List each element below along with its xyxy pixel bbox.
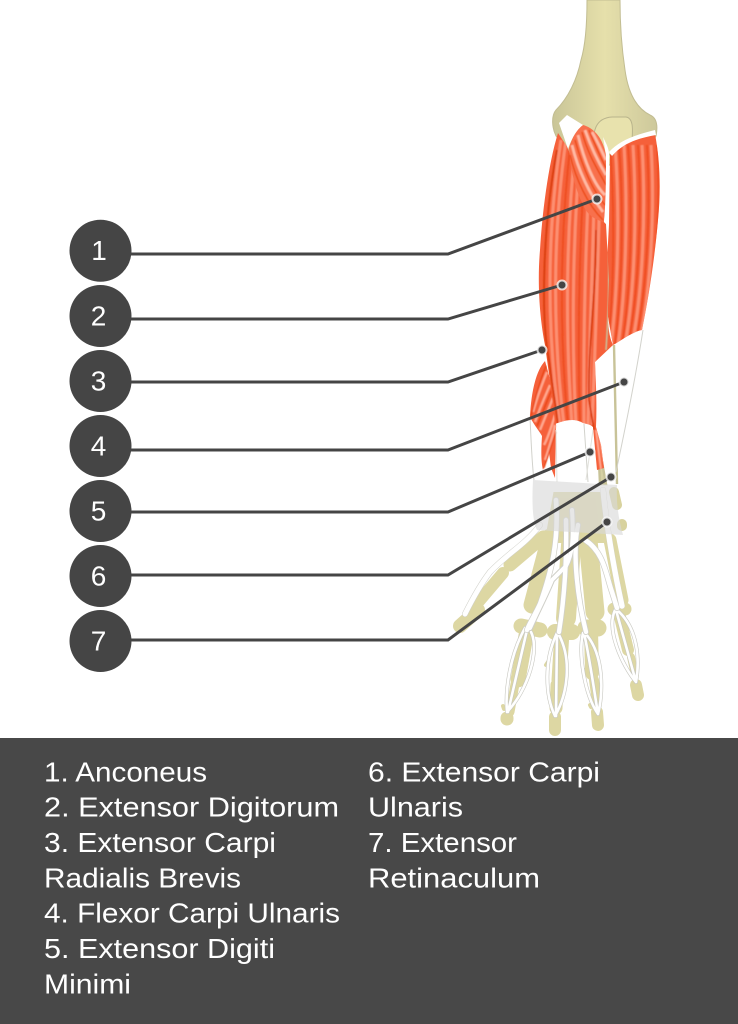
number badge 6: 6	[91, 560, 106, 592]
number badge 3	[70, 350, 132, 412]
legend left column: 3. Extensor Carpi	[44, 827, 276, 858]
legend left column	[44, 756, 340, 999]
tendon edges in forearm	[530, 330, 643, 482]
extensor digitorum and digiti minimi muscle group	[538, 133, 613, 470]
leader line 3	[131, 350, 542, 382]
index finger bones	[532, 537, 550, 605]
main tendon outlines	[465, 490, 622, 632]
leader line 4	[131, 382, 624, 450]
number badge 7	[70, 610, 132, 672]
legend left column: 4. Flexor Carpi Ulnaris	[44, 898, 340, 929]
main extensor tendons	[465, 490, 622, 632]
legend right column: Retinaculum	[368, 862, 540, 893]
leader line 5	[131, 452, 590, 512]
number badge 4: 4	[91, 430, 106, 462]
number badge 7: 7	[91, 626, 106, 656]
legend left column: 2. Extensor Digitorum	[44, 792, 339, 823]
finger hood tendons	[507, 610, 638, 716]
legend left column: Radialis Brevis	[44, 862, 241, 893]
leader line 7	[131, 522, 607, 640]
leader lines	[131, 199, 624, 640]
legend left column: Minimi	[44, 968, 131, 999]
leader line 2	[131, 285, 562, 319]
hand bones	[460, 492, 638, 730]
legend left column: 5. Extensor Digiti	[44, 933, 275, 964]
carpal block	[548, 495, 604, 540]
middle finger bones	[566, 545, 571, 618]
number badge 3: 3	[91, 366, 106, 396]
ring finger bones	[588, 540, 595, 612]
number badge 1: 1	[91, 235, 107, 266]
legend right column: 6. Extensor Carpi	[368, 756, 600, 788]
white tendon patches	[559, 115, 656, 224]
anconeus muscle	[569, 125, 606, 222]
abductor muscle at lower left	[530, 361, 556, 478]
thumb bones	[510, 537, 543, 565]
legend left column: 1. Anconeus	[44, 756, 207, 788]
legend right column: Ulnaris	[368, 792, 463, 823]
illustration: forearm and hand	[460, 0, 665, 730]
leader line 1	[131, 199, 597, 254]
number badge 5: 5	[91, 496, 106, 526]
extensor carpi ulnaris muscle	[608, 135, 660, 345]
number badge 2	[70, 285, 132, 347]
leader line 6	[131, 477, 611, 575]
knuckle nubs	[503, 662, 591, 709]
number badge 6	[70, 545, 132, 607]
number badge 2: 2	[91, 300, 106, 332]
little finger bones	[610, 540, 622, 600]
legend right column: 7. Extensor	[368, 827, 517, 858]
number badge 1	[70, 220, 132, 282]
legend right column	[368, 756, 600, 893]
tendon shadow outlines	[507, 610, 638, 716]
number badge 4	[70, 415, 132, 477]
leader endpoint dots	[538, 194, 628, 526]
humerus bone	[553, 0, 657, 165]
extensor retinaculum band	[532, 480, 623, 535]
number badge 5	[70, 480, 132, 542]
legend panel	[0, 738, 738, 1024]
hand tendons	[465, 490, 638, 716]
radius and ulna shafts at the wrist	[598, 345, 617, 484]
elbow joint	[594, 117, 632, 155]
